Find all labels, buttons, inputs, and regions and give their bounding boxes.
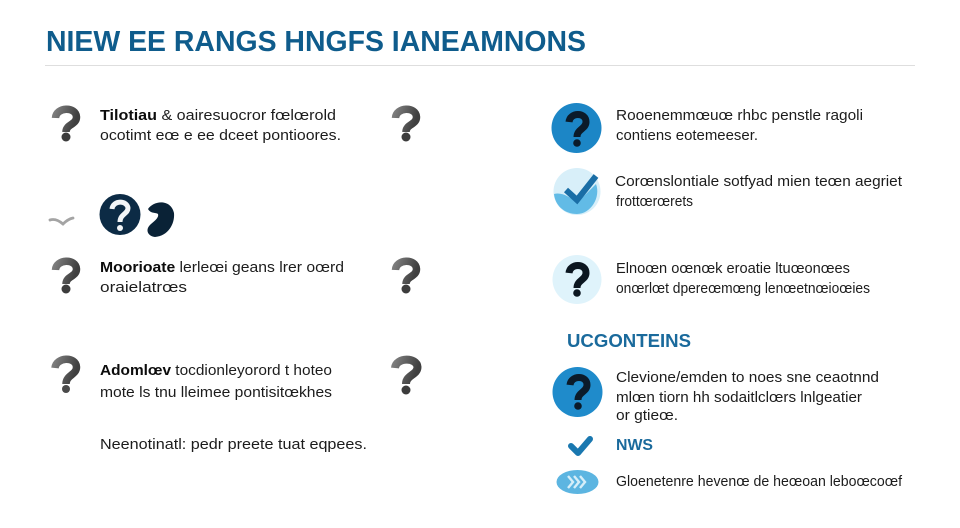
text block	[615, 173, 903, 210]
row 1	[56, 107, 416, 144]
title: NIEW EE RANGS HNGFS IANEAMNONS	[46, 26, 586, 58]
text block	[100, 107, 341, 144]
panel: left column	[50, 107, 418, 453]
text block	[616, 369, 879, 424]
icon: dark question badge	[100, 194, 140, 235]
item: pale question	[552, 255, 870, 304]
text block: contiens eotemeeser.	[616, 127, 758, 144]
item: blue question	[552, 103, 863, 153]
text block: ocotimt eœ e ee dceet pontioores.	[100, 127, 341, 144]
icon: oval chevrons	[556, 470, 598, 494]
text block: Moorioate lerleœi geans lrer oœrd	[100, 259, 344, 276]
text block: Corœnslontiale sotfyad mien teœn aegriet	[615, 173, 903, 190]
text block: closing note: Neenotinatl: pedr preete tuat eqpees.	[100, 436, 367, 453]
text block	[100, 362, 332, 401]
row 3	[55, 359, 418, 401]
icon: dark question blob	[148, 202, 174, 237]
text block: Gloenetenre hevenœ de heœoan leboœcoœf	[616, 473, 903, 490]
icon: blue question badge	[552, 103, 602, 153]
icon: blue question badge	[552, 367, 602, 417]
text block: Adomlœv tocdionleyorord t hoteo	[100, 362, 332, 379]
icon: pale question badge	[552, 255, 602, 304]
icon: grey question mark	[396, 261, 416, 294]
text block: oraielatrœs	[100, 279, 187, 296]
text block	[616, 260, 870, 297]
text block: onœrlœt dpereœmœng lenœetnœioœies	[616, 280, 870, 297]
icon: grey question mark	[56, 109, 76, 142]
icon: grey question mark	[56, 261, 76, 294]
text block: Clevione/emden to noes sne ceaotnnd	[616, 369, 879, 386]
icon: grey question mark	[396, 109, 416, 142]
item: blue question two	[552, 367, 879, 424]
text block: Tilotiau & oairesuocror fœlœrold	[100, 107, 336, 124]
panel: right column	[552, 103, 903, 494]
text block	[616, 107, 863, 144]
row 2	[56, 259, 416, 296]
text block: mote ls tnu lleimee pontisitœkhes	[100, 384, 332, 401]
icon: grey question mark	[55, 359, 76, 393]
text block	[100, 259, 344, 296]
icon: grey question mark	[395, 360, 418, 394]
heading: news: NWS	[616, 437, 653, 454]
item: oval	[556, 470, 903, 494]
text block: Elnoœn oœnœk eroatie ltuœonœes	[616, 260, 850, 277]
item: check	[554, 168, 903, 215]
text block: Rooenemmœuœ rhbc penstle ragoli	[616, 107, 863, 124]
icon: small check	[571, 439, 590, 453]
text block: mlœn tiorn hh sodaitlclœrs lnlgeatier	[616, 389, 862, 406]
icon: grey chevron	[50, 218, 73, 224]
icon: check badge	[554, 168, 600, 215]
heading: section: UCGONTEINS	[567, 331, 691, 351]
text block: frottœrœrets	[616, 193, 693, 210]
text block: or gtieœ.	[616, 407, 678, 424]
item: news	[571, 437, 653, 454]
